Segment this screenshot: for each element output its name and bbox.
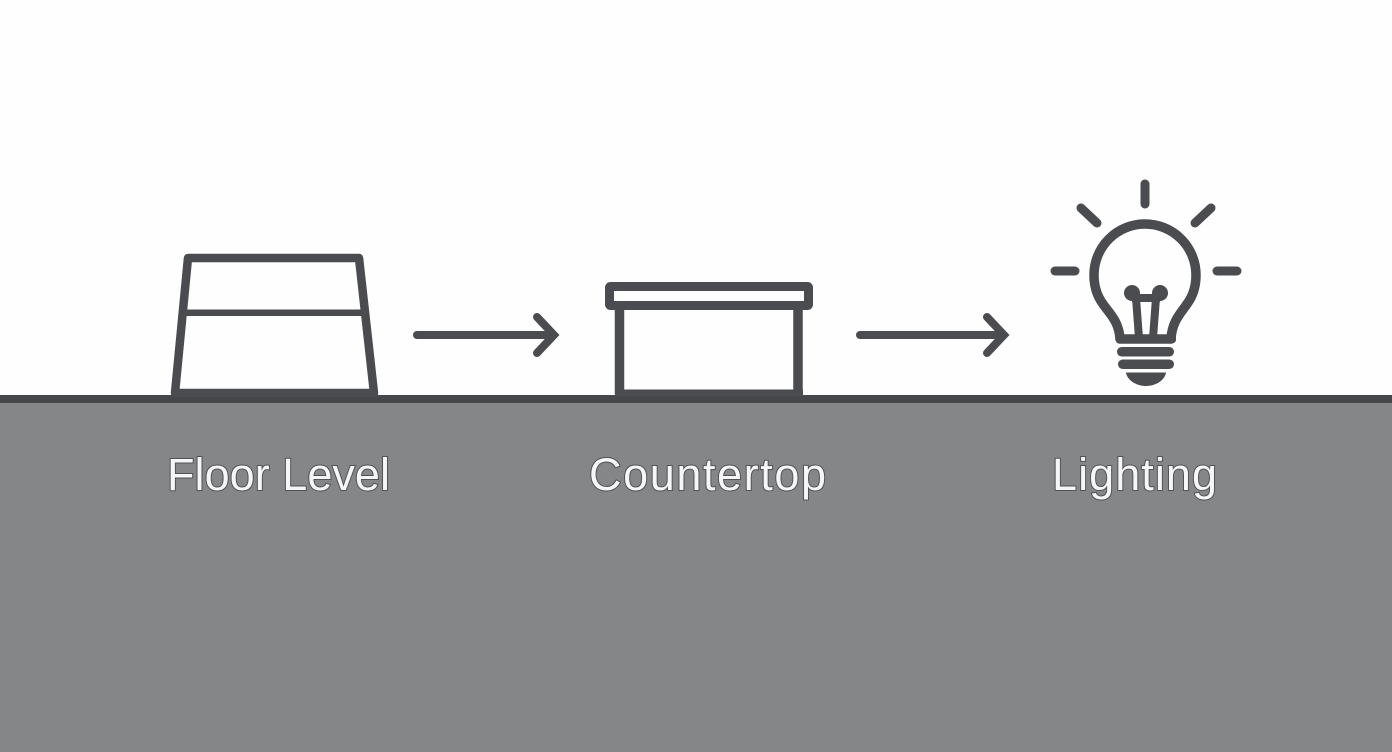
bulb screw base — [1116, 335, 1176, 386]
arrow: countertop to lighting — [860, 317, 1004, 353]
label: Lighting: Lighting — [1052, 449, 1217, 500]
label: Countertop: Countertop — [589, 449, 826, 500]
panel: grey ground area — [0, 403, 1392, 752]
bulb outline — [1094, 224, 1196, 339]
icon: light bulb — [1055, 184, 1237, 386]
filament — [1124, 285, 1168, 338]
icon: countertop box — [610, 286, 808, 394]
icon: floor level trapezoid — [175, 258, 374, 393]
arrow: floor level to countertop — [417, 317, 554, 353]
label: Floor Level: Floor Level — [167, 449, 390, 500]
icon: light rays — [1055, 184, 1237, 271]
ground line — [0, 395, 1392, 403]
